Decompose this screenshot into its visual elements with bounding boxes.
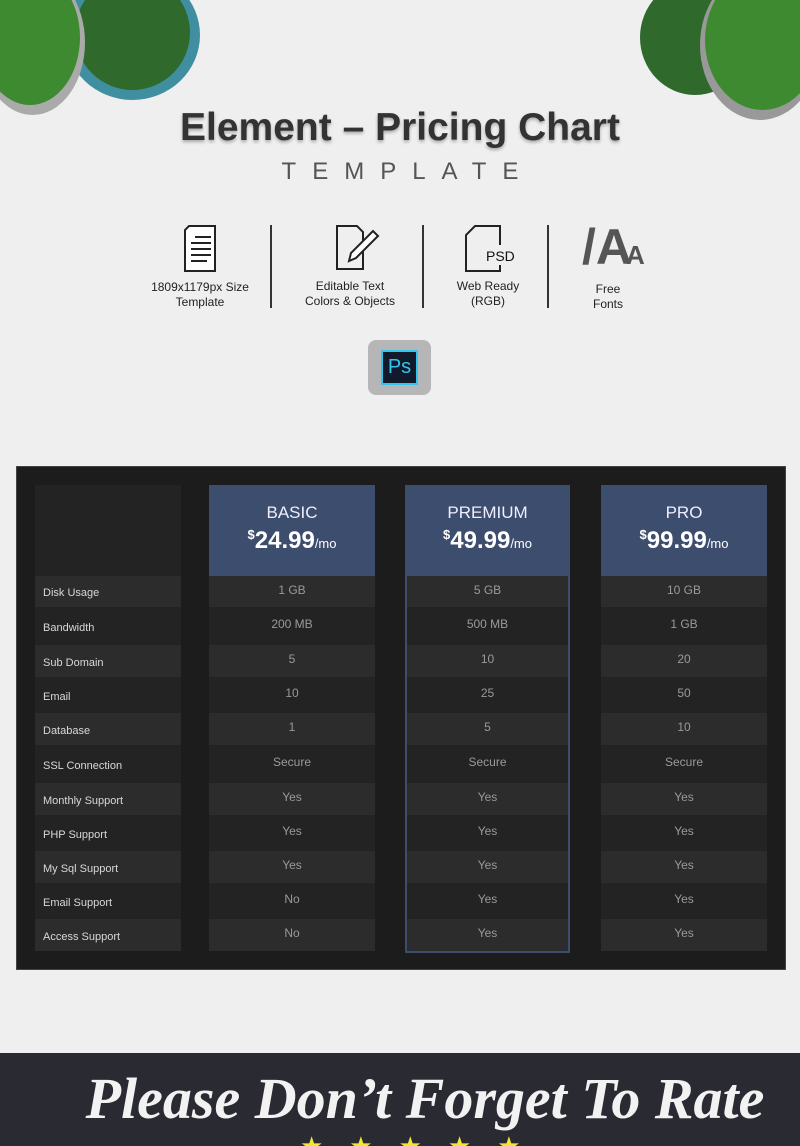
rows: Yes <box>478 892 497 906</box>
rows: My Sql Support <box>43 862 118 874</box>
rows: 10 <box>481 652 494 666</box>
header: premium: $49.99/mo <box>443 527 532 554</box>
caption 3: (RGB) <box>471 294 505 308</box>
rows: 5 <box>289 652 295 666</box>
rows: Secure <box>273 755 311 769</box>
rows: Yes <box>674 824 694 838</box>
rows: Yes <box>282 858 302 872</box>
icon: edit <box>336 225 380 270</box>
rows: Yes <box>674 926 694 940</box>
header: basic: BASIC <box>266 503 318 522</box>
caption 1: Template <box>176 295 224 309</box>
rows: 10 GB <box>667 582 701 596</box>
rows: Email <box>43 690 71 702</box>
features row <box>151 219 645 311</box>
rows: 10 <box>677 720 691 734</box>
rows: 500 MB <box>467 617 508 631</box>
rows: PHP Support <box>43 828 107 840</box>
rows: 5 <box>484 720 491 734</box>
icon: fonts: /A <box>582 219 632 275</box>
rows: 20 <box>677 652 691 666</box>
header: pro: $99.99/mo <box>640 527 728 554</box>
rows: Yes <box>478 790 497 804</box>
rows: Bandwidth <box>43 622 94 634</box>
rows: Email Support <box>43 896 112 908</box>
caption 1 <box>151 280 249 309</box>
rows: No <box>284 892 300 906</box>
caption 3: Web Ready <box>457 279 519 293</box>
rows: 25 <box>481 686 494 700</box>
caption 2: Editable Text <box>316 279 384 293</box>
rate banner <box>0 1053 800 1146</box>
rows: Yes <box>674 858 694 872</box>
header: basic <box>209 485 375 576</box>
caption 2: Colors & Objects <box>305 294 395 308</box>
rows: Yes <box>674 790 694 804</box>
premium highlight border <box>405 576 570 953</box>
rows: Access Support <box>43 930 120 942</box>
rows: Sub Domain <box>43 656 104 668</box>
rows: 10 <box>285 686 299 700</box>
rows: Database <box>43 724 90 736</box>
icon: fonts: A <box>626 240 645 270</box>
rows: Yes <box>478 858 497 872</box>
rows: 1 GB <box>278 582 306 596</box>
rows: Secure <box>665 755 703 769</box>
caption 4: Free <box>596 282 620 296</box>
header: pro: PRO <box>666 503 702 522</box>
plant left <box>0 0 200 115</box>
icon: photoshop <box>368 340 431 395</box>
rows: 5 GB <box>474 582 501 596</box>
plant right <box>640 0 800 120</box>
icon: document <box>184 225 216 272</box>
rows: Yes <box>282 824 302 838</box>
pricing table panel <box>16 466 786 970</box>
header: premium: PREMIUM <box>447 503 528 522</box>
rows: 1 <box>289 720 295 734</box>
rows: SSL Connection <box>43 760 122 772</box>
icon: psd <box>465 225 515 272</box>
caption 3 <box>456 279 520 308</box>
caption 1: 1809x1179px Size <box>151 280 249 294</box>
rows: Monthly Support <box>43 794 123 806</box>
rows: Yes <box>674 892 694 906</box>
header: premium <box>405 485 570 576</box>
rows: Yes <box>478 824 497 838</box>
caption 2 <box>305 279 395 308</box>
caption 4 <box>593 282 623 311</box>
header: pro <box>601 485 767 576</box>
title: Element – Pricing Chart <box>180 106 620 149</box>
header: basic: $24.99/mo <box>248 527 336 554</box>
icon: psd: PSD <box>486 248 515 264</box>
caption 4: Fonts <box>593 297 623 311</box>
rows: Yes <box>478 926 497 940</box>
banner text: Please Don’t Forget To Rate <box>86 1066 764 1131</box>
rows: Yes <box>282 790 302 804</box>
rows: Disk Usage <box>43 587 99 599</box>
rows: No <box>284 926 300 940</box>
rows: 200 MB <box>271 617 313 631</box>
rows: 50 <box>677 686 691 700</box>
rows: Secure <box>468 755 507 769</box>
subtitle: TEMPLATE <box>282 158 534 185</box>
rows: 1 GB <box>670 617 698 631</box>
icon: photoshop: Ps <box>388 356 411 378</box>
